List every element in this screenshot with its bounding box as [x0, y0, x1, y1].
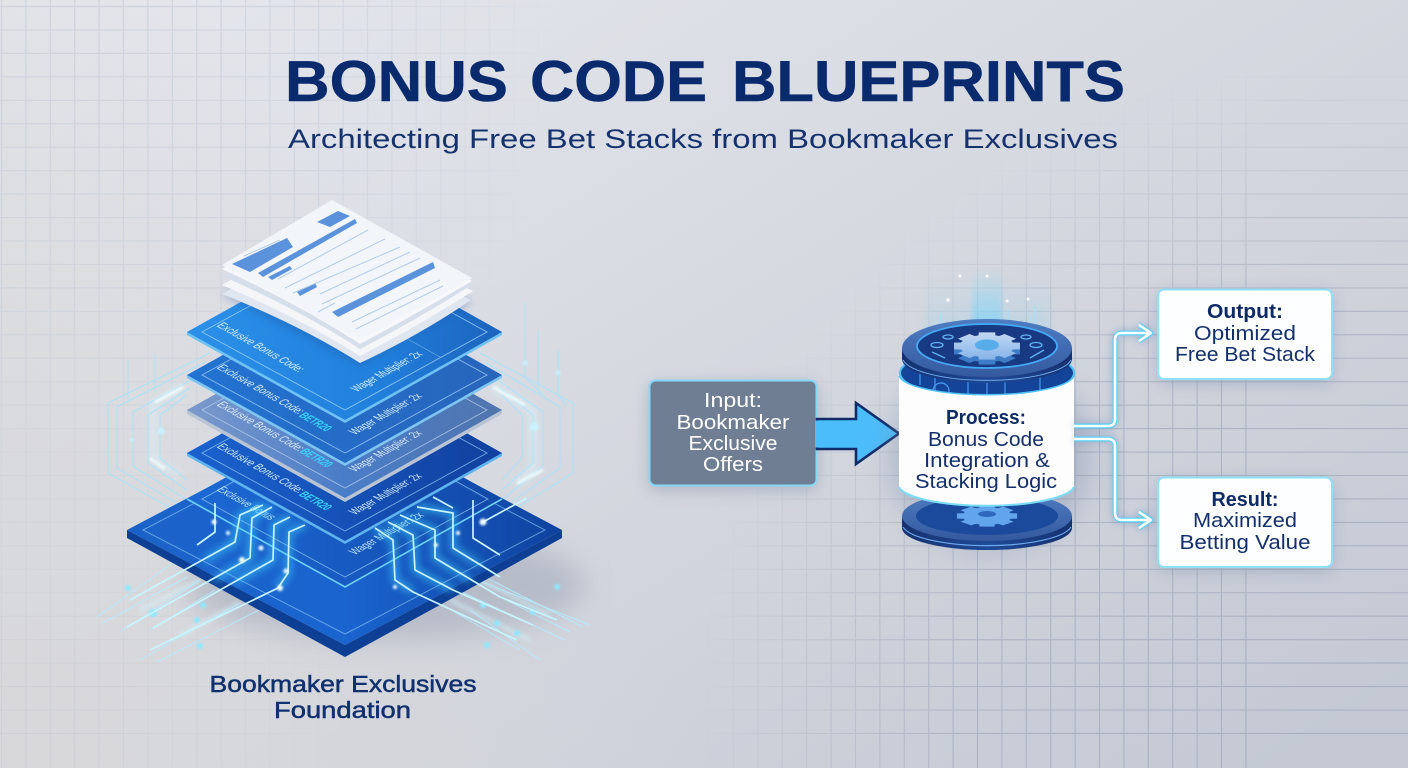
- layer 5: Wager Multiplier: 2x: [345, 510, 428, 556]
- layer 2: BETR20: [295, 411, 335, 433]
- layer 3: Wager Multiplier: 2x: [345, 428, 426, 473]
- caption: foundation: Bookmaker Exclusives: [210, 671, 476, 697]
- panel: output: Optimized: [1194, 323, 1296, 345]
- process text: Process:: [946, 407, 1026, 429]
- glowing circuit traces: [127, 497, 557, 650]
- layer 2: Exclusive Bonus Code:: [213, 363, 308, 416]
- panel: output: Output:: [1207, 301, 1283, 323]
- panel: result: Maximized: [1193, 510, 1297, 532]
- panel: output: [1158, 290, 1332, 383]
- layer 3: [187, 322, 502, 502]
- process text: Integration &: [924, 450, 1051, 472]
- panel: input: [649, 380, 817, 490]
- cylinder shadow: [890, 360, 1090, 550]
- title: BLUEPRINTS: [732, 50, 1125, 114]
- panel: input: Exclusive: [688, 433, 778, 455]
- bottom disk: [902, 491, 1072, 550]
- layer 4: Wager Multiplier: 2x: [345, 471, 426, 516]
- layer 3: Exclusive Bonus Code:: [213, 400, 308, 453]
- long light beams leaving the plate: [97, 530, 590, 662]
- rising light beam: [925, 268, 1050, 340]
- title: BONUS: [285, 50, 508, 114]
- panel: result: Result:: [1212, 489, 1278, 511]
- layer 2: Wager Multiplier: 2x: [345, 391, 426, 436]
- paper stack: [222, 200, 473, 366]
- layer 1: [187, 244, 502, 423]
- panel: input: Bookmaker: [676, 412, 790, 434]
- layer 1: Wager Multiplier: 2x: [347, 349, 426, 393]
- arrow: process to result: [1074, 439, 1151, 528]
- process text: Bonus Code: [928, 429, 1044, 451]
- title: CODE: [530, 50, 707, 114]
- plate shadow: [185, 530, 585, 640]
- arrow: process to output: [1074, 325, 1151, 426]
- caption: foundation: Foundation: [274, 697, 411, 723]
- layer 5: Exclusive Bonus: [213, 485, 280, 522]
- panel: input: Offers: [703, 454, 763, 476]
- arrow: input to process: [815, 403, 899, 464]
- panel: result: Betting Value: [1180, 532, 1310, 554]
- cylinder body: [899, 376, 1074, 506]
- layer 5: [187, 411, 502, 587]
- layer 3: BETR20: [296, 447, 336, 469]
- caption: foundation: [210, 671, 476, 723]
- top disk: [902, 319, 1072, 383]
- panel: input: Input:: [704, 390, 762, 412]
- base plate: [127, 415, 562, 657]
- illustration: layered bonus code stack: [97, 200, 590, 662]
- panel: result: [1158, 478, 1332, 571]
- subtitle: Architecting Free Bet Stacks from Bookmaker Exclusives: [288, 124, 1118, 154]
- layer 2: [187, 287, 502, 466]
- glowing hexagonal rings: [108, 303, 573, 517]
- title: [285, 50, 1125, 114]
- cylinder interior: [900, 348, 1074, 398]
- layer 1: Exclusive Bonus Code:: [213, 321, 308, 374]
- process text: [915, 407, 1057, 493]
- panel: output: Free Bet Stack: [1175, 344, 1316, 366]
- layer 4: [187, 365, 502, 544]
- layer 4: Exclusive Bonus Code:: [213, 442, 308, 495]
- top sheet: [222, 200, 472, 340]
- layer 4: BETR20: [295, 490, 335, 512]
- process text: Stacking Logic: [915, 471, 1057, 493]
- icon: process cylinder: [890, 268, 1090, 550]
